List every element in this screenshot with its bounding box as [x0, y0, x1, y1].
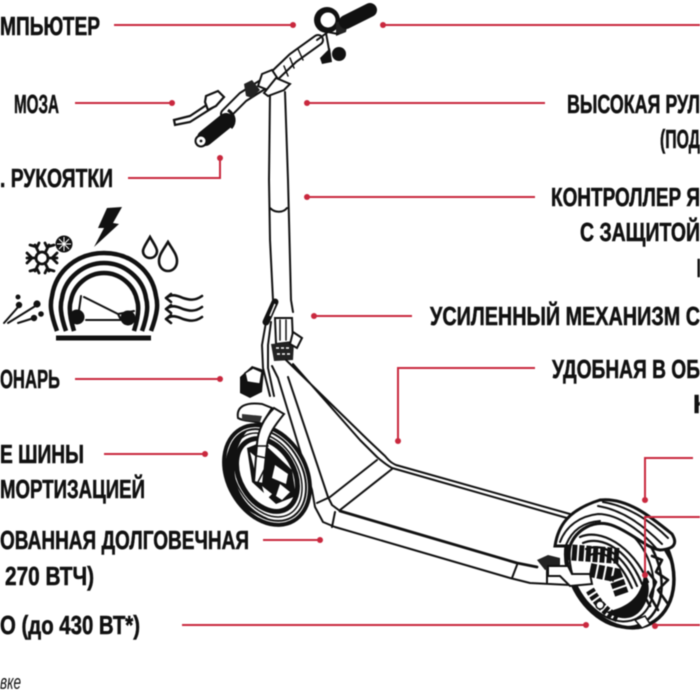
red callout lines — [75, 22, 700, 629]
front tyre shading — [225, 430, 268, 518]
folding clamp — [271, 318, 302, 361]
left label: tyres: МОРТИЗАЦИЕЙ — [0, 474, 145, 504]
icon: lightning bolt — [94, 207, 122, 247]
right label: controller — [551, 182, 700, 283]
fork — [254, 408, 284, 484]
rear wheel tyre — [543, 483, 695, 648]
left label: grip: . РУКОЯТКИ — [0, 163, 113, 193]
right label: deck — [552, 354, 700, 419]
handlebar tube — [226, 40, 318, 114]
front fender — [238, 404, 272, 424]
handlebar clamps — [244, 70, 290, 98]
footnote: вке — [0, 672, 21, 694]
rear tyre tread — [642, 548, 672, 610]
icon: arches — [51, 253, 157, 338]
bell display — [314, 7, 348, 55]
left label: motor power: О (до 430 ВТ*) — [0, 610, 140, 640]
icon: dust particles — [4, 294, 44, 323]
left label: tyres — [0, 439, 145, 504]
front wheel — [207, 410, 327, 540]
headlight — [240, 366, 264, 398]
left label: tyres: Е ШИНЫ — [0, 439, 84, 469]
cable and latch — [262, 302, 275, 396]
icon: water drops — [143, 237, 177, 271]
left grip — [196, 110, 234, 146]
front hub — [247, 442, 296, 504]
icon: snowflake large — [27, 243, 57, 273]
left label: battery — [0, 525, 249, 591]
stem — [269, 92, 293, 312]
left label: computer: МПЬЮТЕР — [0, 11, 100, 41]
icon: weather protection — [4, 207, 202, 338]
left label: brake: МОЗА — [14, 89, 59, 119]
left label: battery: 270 ВТЧ) — [5, 561, 94, 591]
icon: wind — [166, 294, 202, 323]
icon: mini scooter — [70, 296, 136, 326]
scooter illustration — [174, 7, 695, 648]
frame — [272, 360, 570, 585]
brake lever — [174, 91, 224, 125]
rear hub and brake — [537, 552, 650, 628]
rear fender — [555, 500, 675, 550]
left label: battery: ОВАННАЯ ДОЛГОВЕЧНАЯ — [0, 525, 249, 555]
icon: snowflake small — [56, 236, 72, 252]
deck inner edge — [340, 511, 537, 567]
right grip — [346, 10, 370, 22]
right lever — [320, 47, 346, 64]
left label: headlight: ОНАРЬ — [0, 364, 60, 394]
right label: high handlebar — [567, 89, 700, 154]
rear hub arcs — [580, 535, 648, 588]
